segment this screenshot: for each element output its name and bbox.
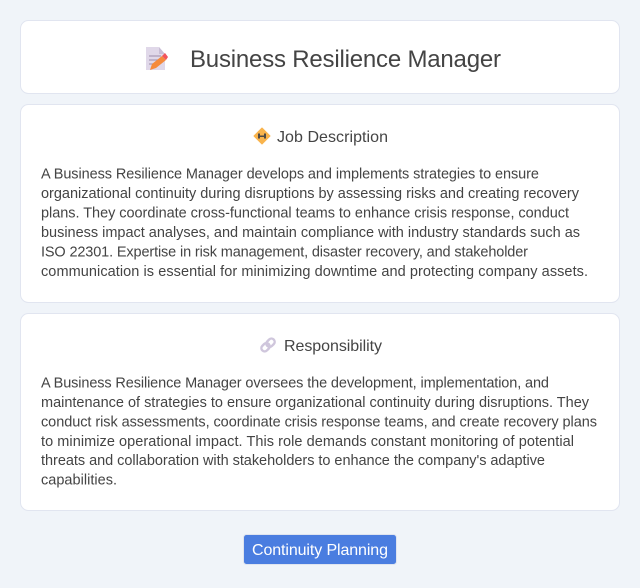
- job description text: A Business Resilience Manager develops and implements strategies to ensure: [41, 166, 539, 182]
- icon: chain link: [260, 337, 276, 353]
- panel: job description: [20, 104, 620, 302]
- job description text: [41, 166, 588, 280]
- icon: document with pencil: [146, 47, 168, 70]
- responsibility text: conduct risk assessments, coordinate crisis response teams, and create recovery plans: [41, 414, 597, 430]
- title text: Business Resilience Manager: [190, 46, 501, 73]
- tag: continuity planning: [244, 534, 396, 564]
- job description text: ISO 22301. Expertise in risk management, disaster recovery, and stakeholder: [41, 244, 528, 260]
- job description text: organizational continuity during disruptions by assessing risks and creating recovery: [41, 186, 580, 202]
- job description text: plans. They coordinate cross-functional teams to enhance crisis response, conduct: [41, 206, 569, 222]
- job description heading: Job Description: [277, 129, 388, 146]
- responsibility text: capabilities.: [41, 472, 117, 488]
- job description text: business impact analyses, and maintain compliance with industry standards such as: [41, 225, 580, 241]
- panel: title: [20, 20, 620, 94]
- responsibility text: A Business Resilience Manager oversees the development, implementation, and: [41, 376, 549, 392]
- responsibility heading: Responsibility: [284, 338, 382, 355]
- responsibility text: to minimize operational impact. This role demands constant monitoring of potential: [41, 434, 574, 450]
- responsibility text: [41, 376, 597, 488]
- panel: responsibility: [20, 314, 620, 510]
- icon: orange diamond: [254, 128, 270, 144]
- responsibility text: threats and collaboration with stakeholders to enhance the company's adaptive: [41, 453, 545, 469]
- tag: continuity planning: Continuity Planning: [252, 542, 388, 559]
- job description text: communication is essential for minimizing downtime and protecting company assets.: [41, 264, 588, 280]
- responsibility text: maintenance of strategies to ensure organizational continuity during disruptions. They: [41, 395, 590, 411]
